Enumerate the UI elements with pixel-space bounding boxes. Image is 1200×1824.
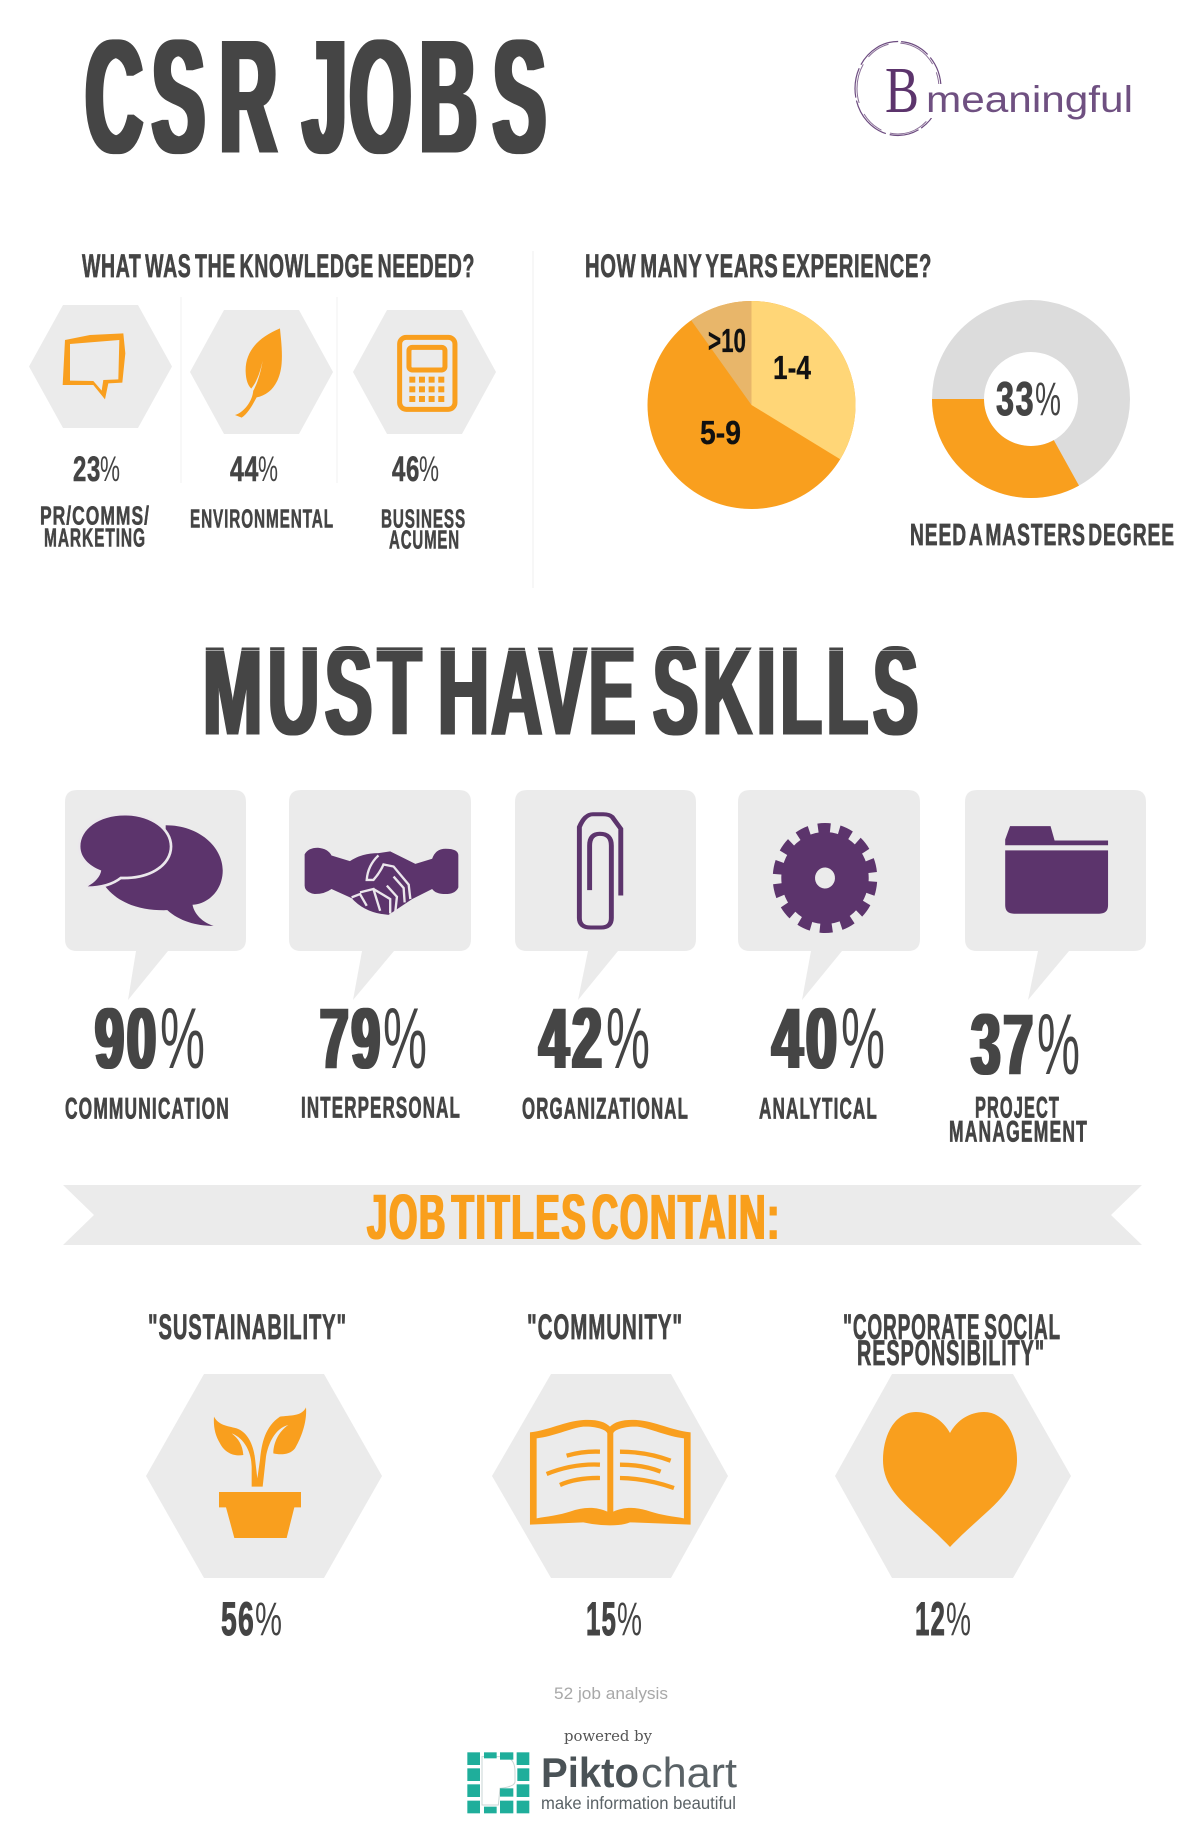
panel: job titles [146,1308,1071,1645]
pie chart: years of experience: 5-9 [700,414,741,451]
icon: calculator [400,337,455,409]
logo: Piktochart [467,1749,737,1813]
title: community [492,1308,728,1645]
heading: must have skills [203,620,923,762]
skill: communication [65,790,246,1126]
item: Business Acumen: 46 [392,450,420,489]
skill: project management: MANAGEMENT [949,1116,1088,1148]
skill: project management: 37 [971,997,1036,1093]
skill: project management: % [1037,997,1080,1093]
heading: knowledge: WHAT WAS THE KNOWLEDGE NEEDED? [82,248,475,284]
title: community: 15 [586,1592,617,1645]
logo: Piktochart: make information beautiful [541,1793,736,1813]
skill: organizational: 42 [539,991,605,1087]
skill: project management: PROJECT [975,1092,1060,1124]
donut chart: masters degree: 33 [996,372,1035,425]
title: sustainability: 56 [221,1592,255,1645]
skill: project management [949,790,1146,1148]
item: PR/Comms/Marketing: MARKETING [44,522,146,552]
logo: Bmeaningful: meaningful [926,79,1133,120]
skill: analytical: 40 [772,991,840,1087]
icon: handshake [305,848,458,915]
title: corporate social responsibility: 12 [915,1592,946,1645]
item: Environmental: ENVIRONMENTAL [190,504,334,534]
item: PR/Comms/Marketing: 23 [73,450,101,489]
skill: organizational [515,790,696,1126]
heading: must have skills: SKILLS [653,620,923,762]
skill: interpersonal [289,790,471,1124]
title: corporate social responsibility: RESPONSIBILITY" [857,1334,1045,1373]
skill: communication: % [160,991,205,1087]
item: Environmental: 44 [230,450,259,489]
item: PR/Comms/Marketing: PR/COMMS/ [40,500,150,530]
donut chart: masters degree [932,326,1104,498]
icon: speech bubbles [80,816,223,926]
donut chart: masters degree: % [1035,372,1061,425]
title: corporate social responsibility: % [946,1592,971,1645]
skill: analytical: % [841,991,885,1087]
heading: must have skills: MUST [203,620,427,762]
item: Environmental [190,310,334,534]
pie chart: years of experience: 1-4 [773,349,812,386]
item: Business Acumen: BUSINESS [381,504,466,534]
logo: Bmeaningful: B [885,54,919,127]
icon: paperclip [579,814,621,927]
title: sustainability: % [255,1592,282,1645]
item: PR/Comms/Marketing [29,305,172,552]
item: PR/Comms/Marketing: % [100,450,120,489]
item: Business Acumen: ACUMEN [389,524,460,554]
skill: analytical [738,790,920,1126]
skill: interpersonal: INTERPERSONAL [301,1092,461,1124]
panel: skills [65,790,1146,1148]
title: corporate social responsibility [835,1308,1071,1645]
pie chart: years of experience: >10 [708,322,746,359]
skill: analytical: ANALYTICAL [759,1092,878,1126]
icon: chat bubble [63,333,125,399]
skill: interpersonal: 79 [320,991,383,1087]
icon: plant [214,1407,306,1538]
title: community: "COMMUNITY" [527,1308,683,1347]
pie chart: years of experience [648,301,856,509]
skill: organizational: ORGANIZATIONAL [522,1092,689,1126]
icon: heart [883,1412,1017,1547]
title: sustainability: "SUSTAINABILITY" [148,1308,347,1347]
banner: job titles contain [63,1181,1142,1253]
icon: gear [774,825,876,931]
icon: open book [530,1420,691,1525]
heading: experience: HOW MANY YEARS EXPERIENCE? [585,248,932,284]
icon: folder [1005,826,1108,914]
logo: Bmeaningful [855,42,1133,136]
banner: job titles contain: JOB TITLES CONTAIN: [367,1181,781,1253]
logo: Piktochart: Pikto [541,1749,639,1796]
item: Business Acumen [353,310,496,554]
title: CSR JOBS [85,8,546,188]
skill: organizational: % [606,991,650,1087]
panel: knowledge needed [29,248,496,554]
heading: must have skills: HAVE [438,620,638,762]
skill: communication: COMMUNICATION [65,1092,230,1126]
credit: powered by: powered by [564,1729,653,1745]
title: sustainability [146,1308,382,1645]
skill: interpersonal: % [383,991,427,1087]
footnote: sample size: 52 job analysis [554,1684,668,1703]
skill: communication: 90 [95,991,159,1087]
panel: experience [585,248,1175,552]
logo: Piktochart: chart [641,1749,737,1796]
item: Environmental: % [258,450,278,489]
icon: leaf [235,328,282,418]
title: community: % [617,1592,642,1645]
item: Business Acumen: % [419,450,439,489]
